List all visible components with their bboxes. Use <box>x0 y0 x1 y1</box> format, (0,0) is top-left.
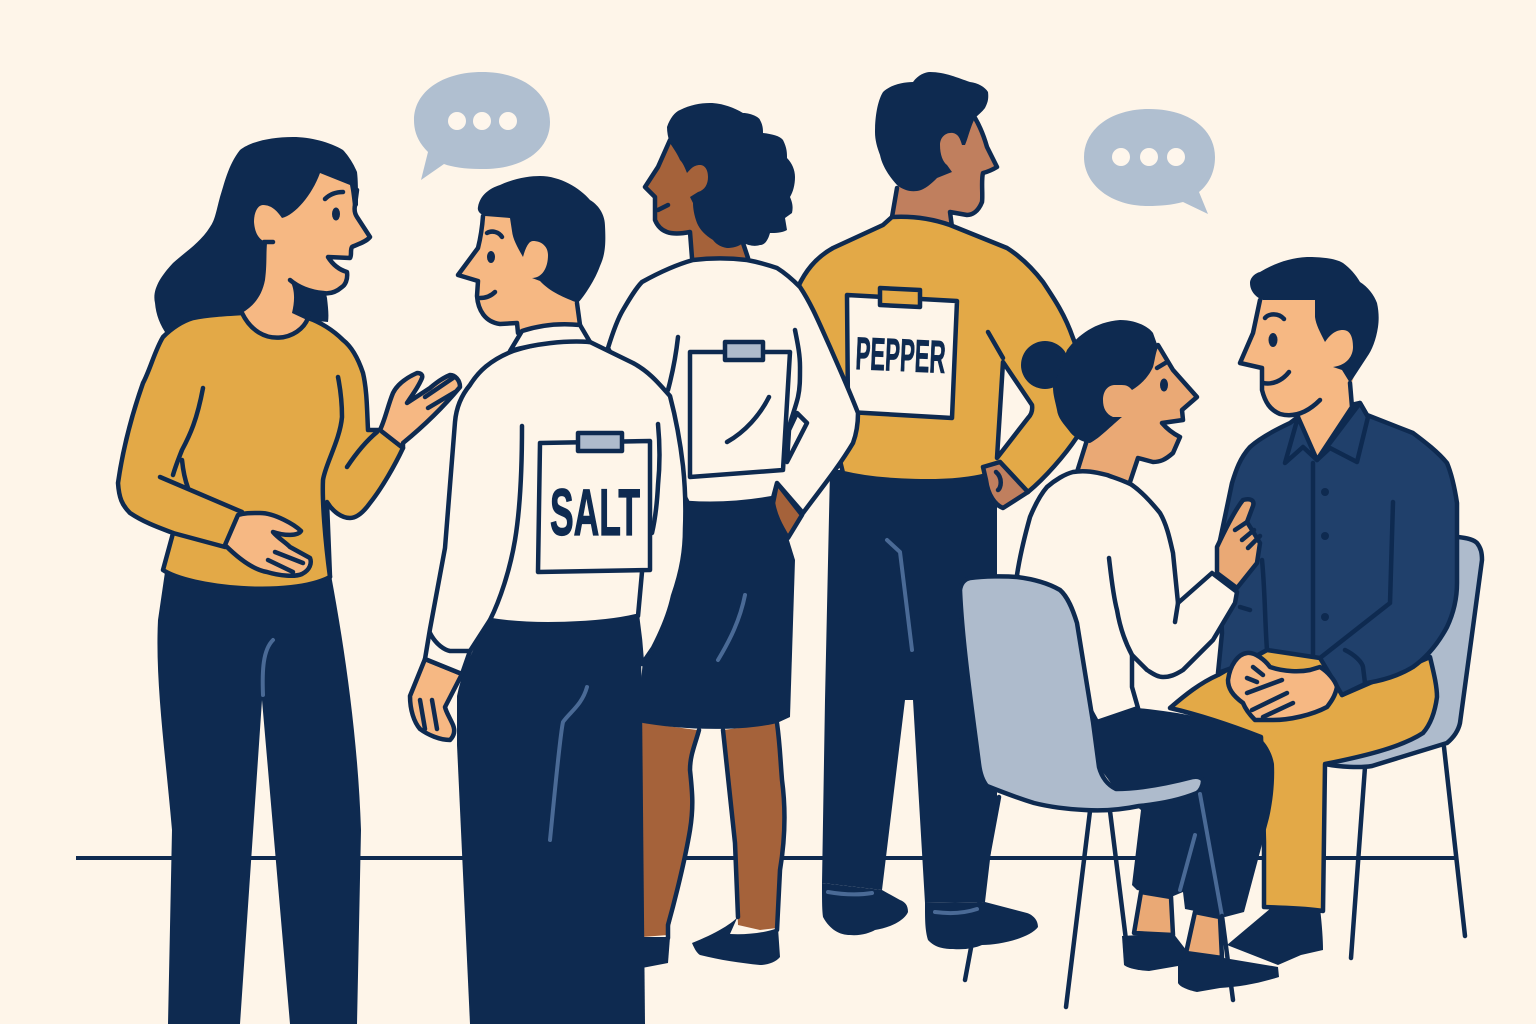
hand <box>410 659 462 740</box>
lower legs <box>1134 892 1173 935</box>
icon: left speech bubble <box>414 72 550 180</box>
face profile <box>892 118 997 227</box>
shirt <box>1218 403 1457 695</box>
eye and smile <box>480 232 502 298</box>
clasped hands <box>1228 653 1337 720</box>
sweater <box>118 313 403 589</box>
face profile and neck lines <box>1240 300 1352 460</box>
hand <box>773 483 802 538</box>
person: woman in mustard sweater <box>118 137 460 1024</box>
floor line <box>76 856 1455 860</box>
shirt fold lines <box>430 424 660 651</box>
shirt <box>608 258 858 513</box>
trousers <box>457 614 645 1024</box>
eye and smile <box>1263 314 1289 384</box>
paper corner <box>787 413 807 462</box>
face and neck <box>242 173 370 338</box>
arm gap <box>997 362 1032 458</box>
face and neck <box>892 118 997 227</box>
neck and face <box>645 140 760 258</box>
collar <box>1285 403 1368 463</box>
icon: right speech bubble <box>1084 109 1215 214</box>
arm line <box>988 332 1003 358</box>
trousers <box>1170 645 1437 911</box>
hair <box>1250 257 1379 383</box>
person: seated woman <box>1017 320 1279 992</box>
hair <box>875 72 988 191</box>
face and neck <box>1240 300 1365 460</box>
clipboard: salt <box>538 433 650 572</box>
raised hand <box>380 373 460 448</box>
shirt details <box>1240 463 1393 683</box>
skirt <box>637 495 795 729</box>
collar <box>510 324 590 351</box>
face profile, eye and brow <box>264 190 370 293</box>
hair and bun <box>1021 320 1158 443</box>
trousers <box>1095 708 1274 917</box>
pointing hand <box>1217 499 1260 588</box>
hand on hip <box>983 462 1028 508</box>
shoes <box>822 883 908 935</box>
trousers <box>157 572 361 1024</box>
shirt <box>425 341 685 674</box>
face profile <box>1077 345 1197 482</box>
hair <box>478 176 605 303</box>
person: man with salt sign <box>410 176 685 1024</box>
sweater <box>798 217 1085 492</box>
face profile <box>645 140 748 258</box>
chair: seated man <box>1325 537 1482 958</box>
face profile <box>458 216 580 333</box>
chair leg: behind standing man <box>965 797 999 980</box>
clipboard: salt: SALT <box>550 475 640 549</box>
person: man with pepper sign <box>798 72 1085 949</box>
person: woman in skirt with blank sign <box>608 103 858 968</box>
hair <box>154 137 358 335</box>
eye and brow <box>1157 362 1168 392</box>
lower hand <box>225 513 311 576</box>
shoes <box>642 937 670 968</box>
chair: seated woman <box>960 576 1233 1007</box>
curly hair <box>667 103 795 248</box>
shoe <box>1227 908 1323 965</box>
trousers <box>822 470 997 903</box>
shoes <box>1122 933 1190 971</box>
clipboard: pepper <box>847 288 957 418</box>
face and neck <box>1077 345 1197 482</box>
clipboard: blank <box>690 342 790 477</box>
person: seated man <box>1170 257 1457 965</box>
legs <box>637 722 697 937</box>
clipboard: pepper: PEPPER <box>855 327 947 383</box>
neck and face <box>458 200 580 333</box>
shirt <box>1017 471 1237 722</box>
sweater fold lines <box>160 377 377 577</box>
